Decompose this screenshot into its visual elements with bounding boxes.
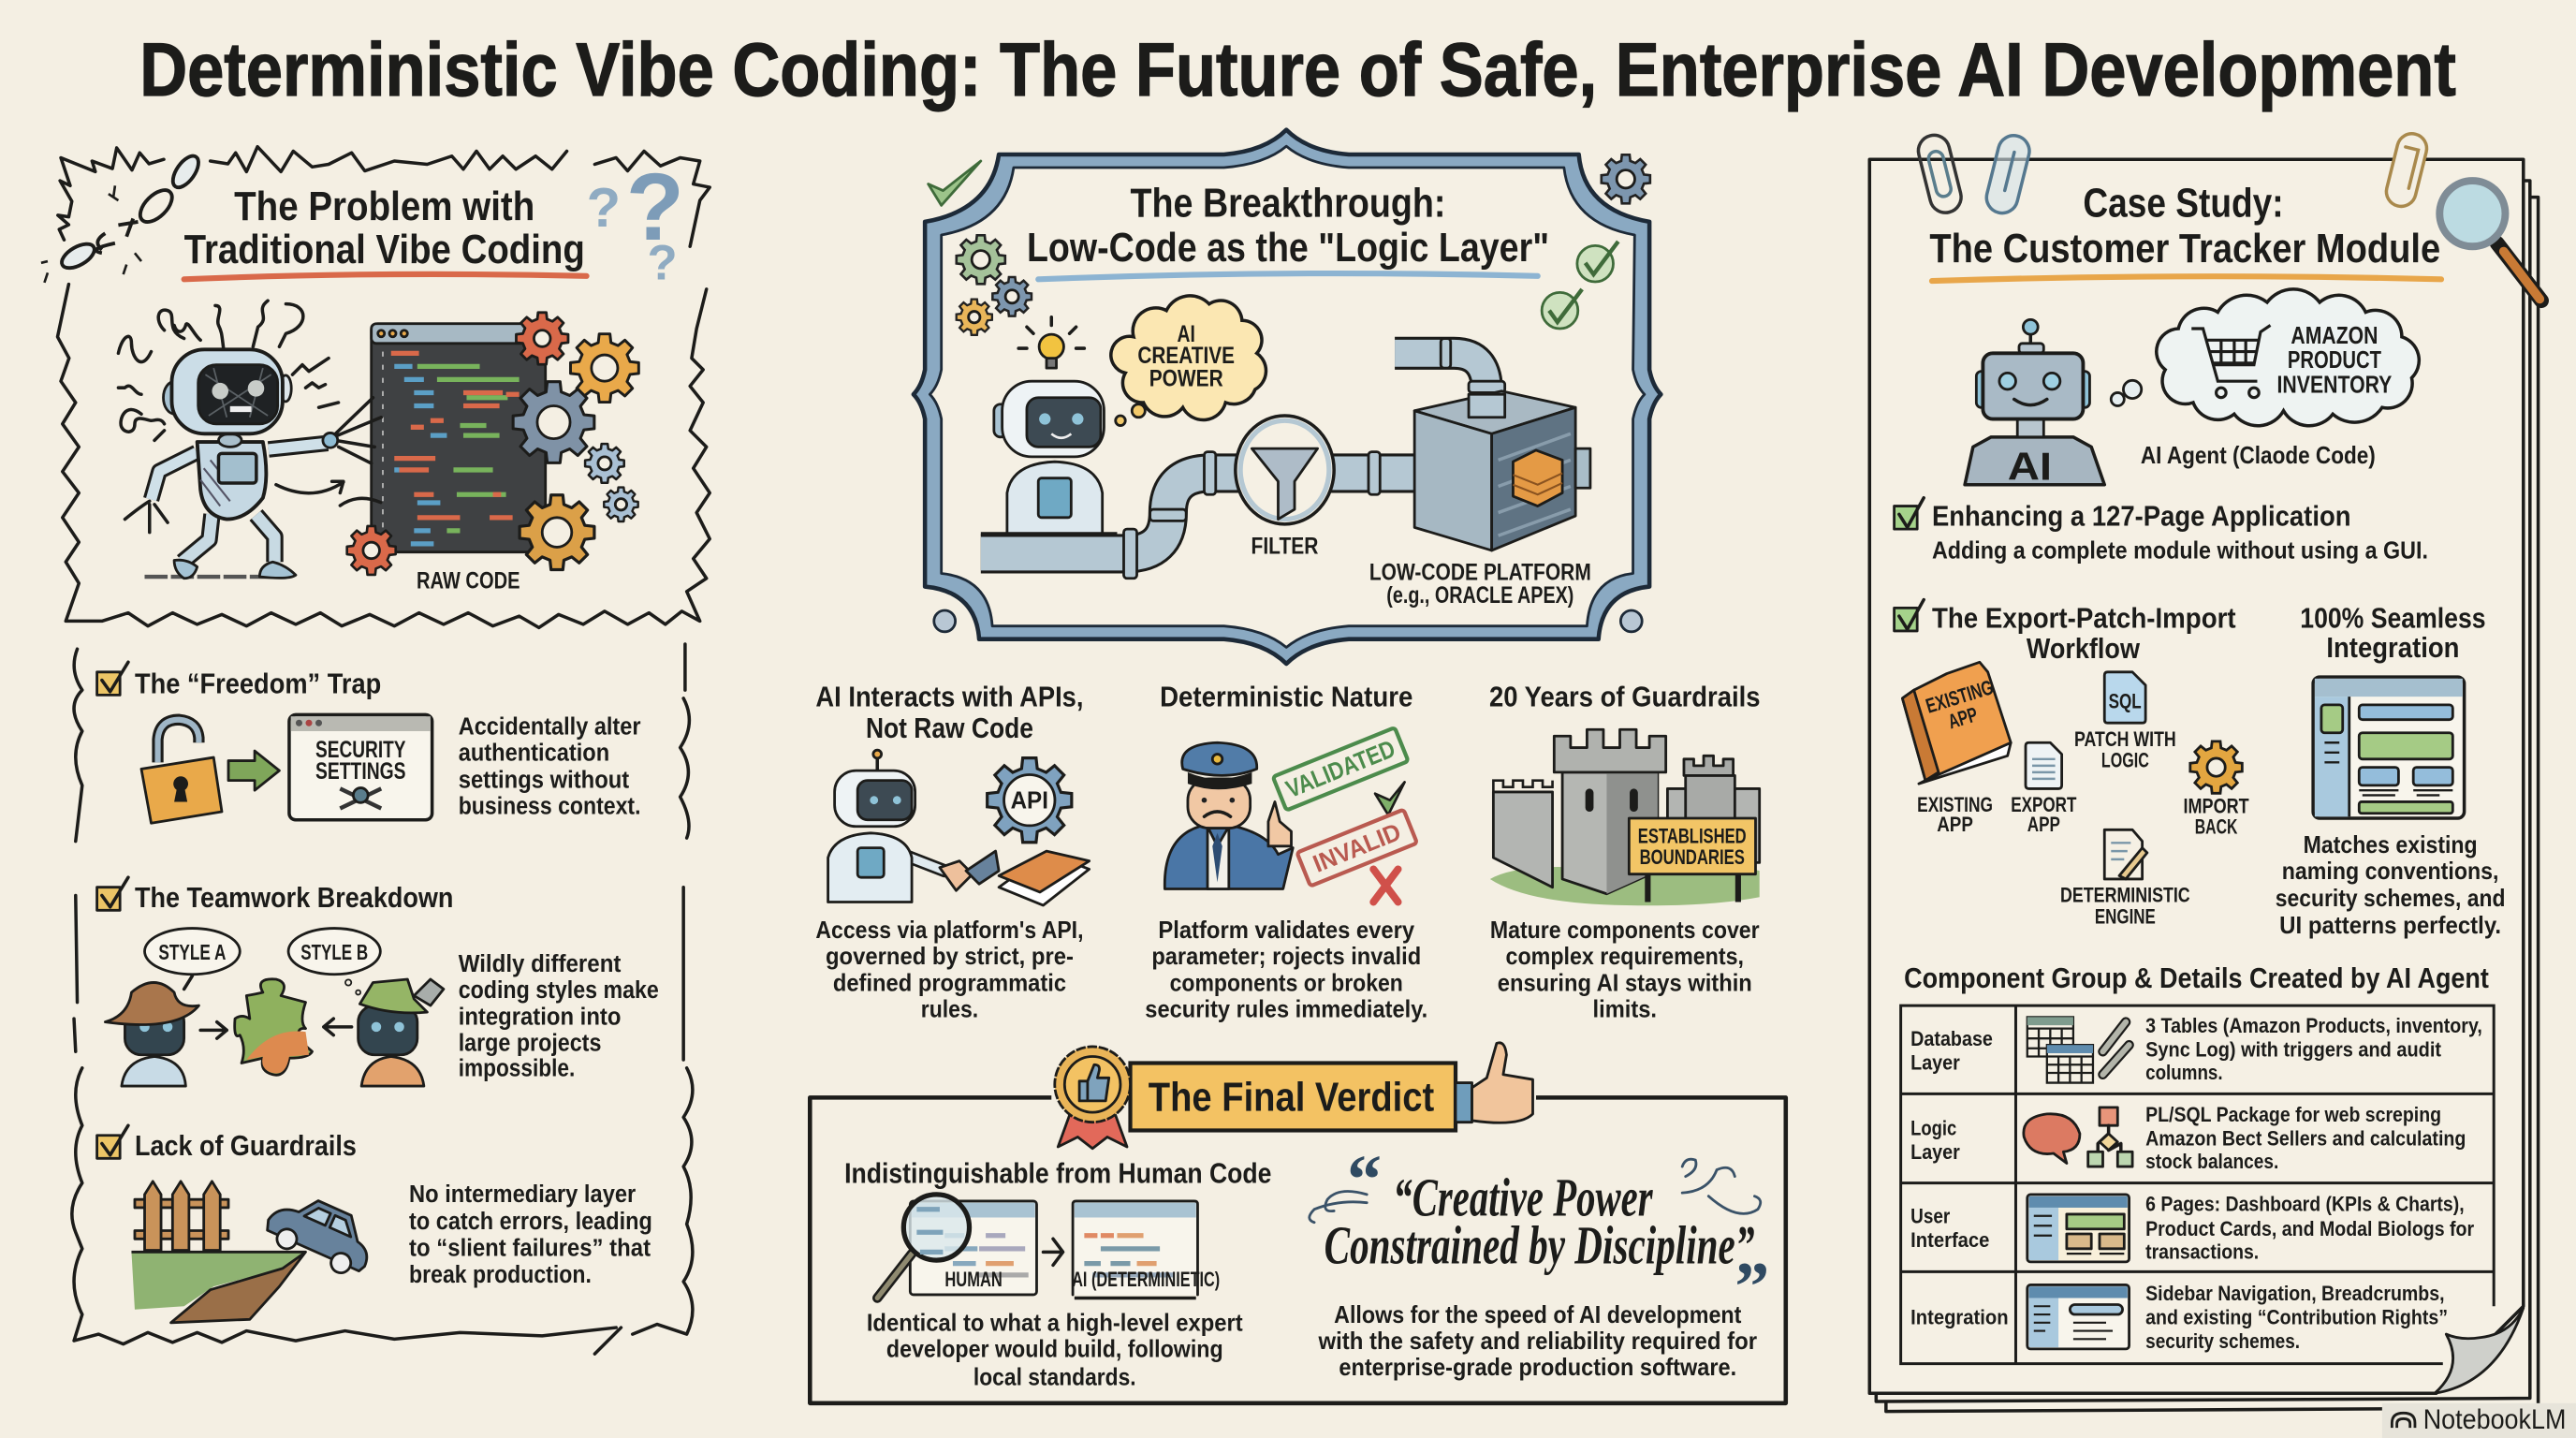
icon: check marks and gears (929, 154, 1650, 632)
heading (815, 681, 1083, 744)
jagged frame (57, 147, 710, 627)
row: user interface: 6 Pages: Dashboard (KPIs & Charts), (2145, 1192, 2465, 1215)
icon: pipes (981, 339, 1505, 579)
panel: the breakthrough (914, 130, 1661, 664)
item: seamless integration (2276, 601, 2505, 939)
cloud: amazon product inventory: INVENTORY (2277, 370, 2393, 398)
castle illustration (1490, 729, 1760, 905)
heading: Indistinguishable from Human Code (844, 1157, 1271, 1190)
heading: Lack of Guardrails (135, 1129, 357, 1162)
text: developer would build, following (886, 1337, 1223, 1363)
column: deterministic nature (1145, 681, 1427, 1022)
text: with the safety and reliability required for (1318, 1328, 1757, 1355)
text: coding styles make (459, 976, 659, 1004)
window: AI: AI (DETERMINIETIC) (1072, 1268, 1220, 1291)
text: Allows for the speed of AI development (1334, 1302, 1742, 1328)
heading (1027, 181, 1549, 279)
wavy frame (72, 644, 693, 1354)
stamp: invalid (1297, 810, 1417, 887)
icon: existing app book: EXISTING (1923, 675, 1996, 718)
page curl (2435, 1308, 2524, 1393)
row: logic layer: Logic (1910, 1117, 1956, 1140)
text: impossible. (459, 1054, 575, 1082)
icon: falling car (260, 1185, 381, 1282)
cloud: amazon product inventory: AMAZON (2291, 321, 2378, 349)
text: security rules immediately. (1145, 996, 1427, 1022)
quote (1325, 1167, 1754, 1276)
text: complex requirements, (1506, 944, 1744, 970)
icon: brain and flow (2024, 1108, 2132, 1167)
text: authentication (459, 739, 609, 767)
robot: creative (981, 381, 1117, 534)
text: Identical to what a high-level expert (867, 1311, 1243, 1337)
banner: The Final Verdict (1149, 1074, 1435, 1120)
icon: API gear: API (1011, 785, 1048, 814)
icon: question marks: ? (648, 235, 678, 290)
text: break production. (409, 1260, 592, 1288)
icon: existing app book: APP (1945, 702, 1981, 733)
text: limits. (1593, 996, 1657, 1022)
text (1145, 917, 1427, 1022)
text: local standards. (973, 1364, 1136, 1390)
item: lack of guardrails (97, 1125, 652, 1323)
robot: AI agent (1965, 319, 2104, 488)
heading: The Problem with (234, 183, 534, 229)
icon: question marks (587, 154, 684, 290)
label (2183, 795, 2249, 839)
label: LOGIC (2101, 749, 2149, 772)
decorative swirls (1310, 1159, 1761, 1223)
label (2011, 793, 2077, 836)
icon: arrow (324, 1019, 352, 1035)
row: integration: Integration (1910, 1306, 2009, 1329)
heading: The Breakthrough: (1131, 181, 1445, 227)
bubble: style A: STYLE A (158, 940, 226, 964)
text: business context. (459, 792, 641, 820)
label (2060, 884, 2190, 928)
robot: confused (118, 301, 381, 579)
icon: existing app book (1902, 662, 2011, 784)
text: Access via platform's API, (815, 917, 1083, 944)
text: No intermediary layer (409, 1180, 636, 1208)
text (867, 1311, 1243, 1390)
text: Matches existing (2304, 832, 2478, 858)
heading: Traditional Vibe Coding (184, 227, 585, 272)
icon: shopping cart (2191, 325, 2271, 398)
label: EXPORT (2011, 793, 2077, 816)
row: integration: security schemes. (2145, 1329, 2300, 1353)
icon: export doc (2026, 742, 2062, 788)
item: enhancing (1895, 498, 2428, 565)
text (459, 712, 641, 820)
icon: paper clips (1915, 130, 2430, 216)
icon: import gear (2190, 741, 2242, 793)
text (459, 949, 659, 1082)
row: logic layer: Amazon Bect Sellers and calculating (2145, 1126, 2466, 1150)
icon: dashboard (2027, 1195, 2130, 1262)
cloud: AI creative power (1111, 296, 1266, 426)
icon: logo (2392, 1413, 2415, 1428)
icon: question marks: ? (626, 154, 684, 260)
text: parameter; rojects invalid (1151, 944, 1421, 970)
text: to catch errors, leading (409, 1207, 652, 1235)
icon: check (1375, 782, 1405, 814)
window: AI (1072, 1201, 1220, 1298)
text: settings without (459, 766, 629, 794)
text (1490, 917, 1760, 1022)
sign: established boundaries (1629, 818, 1755, 902)
icon: check box (97, 662, 128, 695)
row: logic layer: Layer (1910, 1140, 1960, 1164)
window: human: HUMAN (944, 1268, 1003, 1291)
icon: open lock (141, 720, 222, 823)
code window (372, 324, 546, 552)
heading: The Customer Tracker Module (1929, 226, 2440, 271)
icon: sidebar window (2027, 1284, 2130, 1349)
window: human (910, 1201, 1036, 1295)
label: raw code: RAW CODE (417, 568, 520, 594)
icon: puzzle piece (235, 979, 313, 1075)
heading: 100% Seamless (2300, 601, 2486, 634)
squiggles (118, 301, 339, 440)
label (1917, 793, 1993, 836)
cloud: AI creative power: AI (1178, 322, 1195, 347)
icon: arrow (228, 751, 279, 790)
text (815, 917, 1083, 1022)
quote marks (1347, 1141, 1769, 1325)
heading: 20 Years of Guardrails (1489, 681, 1761, 713)
bubble: style B: STYLE B (300, 940, 368, 964)
row: database layer: Layer (1910, 1051, 1960, 1075)
text: Accidentally alter (459, 712, 641, 740)
label: low-code platform: (e.g., ORACLE APEX) (1386, 583, 1573, 609)
security settings window: SETTINGS (315, 759, 406, 785)
icon: platform box (1414, 391, 1590, 550)
row: database layer: 3 Tables (Amazon Products, inventory, (2145, 1014, 2482, 1037)
icon: question marks: ? (587, 176, 621, 239)
column: 20 years of guardrails (1489, 681, 1761, 1022)
paper stack (1869, 159, 2539, 1412)
row: logic layer: PL/SQL Package for web screping (2145, 1103, 2441, 1126)
text: enterprise-grade production software. (1339, 1355, 1736, 1381)
robot: AI agent: AI (2008, 444, 2052, 488)
robot with green hat (359, 979, 444, 1086)
text (409, 1180, 652, 1288)
cloud: amazon product inventory (2111, 289, 2419, 426)
label: APP (2027, 813, 2060, 836)
text: large projects (459, 1028, 601, 1056)
item: workflow (1895, 600, 2249, 928)
icon: magnifier (877, 1195, 970, 1298)
icon: tables and links (2027, 1017, 2130, 1083)
verdict box (810, 1097, 1786, 1403)
icon: cliff (131, 1252, 305, 1323)
quote: “Creative Power (1393, 1167, 1653, 1228)
icon: gears (347, 313, 638, 575)
cloud: AI creative power: CREATIVE (1137, 344, 1235, 369)
icon: pen doc (2104, 829, 2147, 879)
stamp: invalid: INVALID (1309, 817, 1405, 878)
text: Mature components cover (1490, 917, 1760, 944)
label: EXISTING (1917, 793, 1993, 816)
bubble: style A (145, 929, 240, 990)
icon: rule book (999, 851, 1090, 905)
text: governed by strict, pre- (826, 944, 1074, 970)
heading: components table: Component Group & Details Created by AI Agent (1904, 961, 2489, 994)
label: AI agent: AI Agent (Claode Code) (2141, 443, 2376, 469)
heading: AI Interacts with APIs, (815, 681, 1083, 713)
heading: Integration (2326, 631, 2460, 664)
table grid (1901, 1005, 2494, 1364)
icon: SQL doc (2104, 672, 2145, 723)
panel: the problem (41, 147, 710, 627)
text: integration into (459, 1002, 621, 1030)
label: low-code platform: LOW-CODE PLATFORM (1369, 561, 1591, 586)
text: Wildly different (459, 949, 622, 977)
heading: Low-Code as the "Logic Layer" (1027, 225, 1549, 271)
icon: magnifying glass (2438, 179, 2541, 301)
sign: established boundaries: BOUNDARIES (1640, 845, 1745, 869)
text: ensuring AI stays within (1498, 970, 1752, 996)
text: defined programmatic (833, 970, 1066, 996)
icon: arrow (1044, 1239, 1063, 1265)
row: user interface: User (1910, 1205, 1951, 1228)
table (1901, 1005, 2494, 1364)
icon: arrow (200, 1022, 227, 1038)
icon: SQL doc: SQL (2109, 689, 2142, 712)
heading (2300, 601, 2486, 664)
icon: check box (1895, 600, 1924, 631)
cloud: amazon product inventory: PRODUCT (2288, 345, 2381, 374)
quote: Constrained by Discipline” (1325, 1215, 1754, 1276)
row: database layer (1910, 1014, 2482, 1084)
quote marks: ” (1734, 1248, 1769, 1325)
label: low-code platform (1369, 561, 1591, 609)
panel: problem details (72, 644, 693, 1354)
icon: rosette (1055, 1047, 1131, 1149)
label: BACK (2195, 815, 2238, 839)
bubble: style B (288, 929, 380, 994)
heading: Deterministic Nature (1160, 681, 1412, 713)
text: to “slient failures” that (409, 1234, 651, 1262)
heading (184, 183, 587, 279)
heading: The Export-Patch-Import (1932, 601, 2236, 634)
icon: check box (97, 877, 128, 910)
row: user interface: transactions. (2145, 1240, 2259, 1263)
label: ENGINE (2095, 904, 2156, 928)
icon: broken chain (41, 152, 203, 283)
sub-panel: indistinguishable (844, 1157, 1271, 1390)
heading: The Teamwork Breakdown (135, 881, 453, 914)
robot with brown hat (105, 983, 198, 1086)
row: integration (1910, 1282, 2448, 1353)
officer illustration (1164, 742, 1293, 888)
text: naming conventions, (2282, 858, 2498, 885)
label (2074, 727, 2176, 772)
heading (1929, 181, 2441, 281)
heading: The “Freedom” Trap (135, 668, 381, 700)
icon: UI window (2313, 677, 2465, 818)
icon: check box (97, 1125, 128, 1158)
item: freedom trap (97, 662, 641, 823)
heading (1932, 601, 2236, 665)
row: logic layer: stock balances. (2145, 1150, 2278, 1173)
text: security schemes, and (2276, 886, 2505, 912)
label: APP (1937, 813, 1973, 836)
label: PATCH WITH (2074, 727, 2176, 751)
row: user interface: Interface (1910, 1228, 1989, 1252)
row: integration: Sidebar Navigation, Breadcrumbs, (2145, 1282, 2445, 1305)
row: database layer: Database (1910, 1027, 1993, 1050)
item: teamwork breakdown (97, 877, 659, 1086)
label: filter: FILTER (1251, 534, 1319, 559)
security settings window: SECURITY (315, 738, 406, 763)
label: IMPORT (2183, 795, 2249, 818)
label: DETERMINISTIC (2060, 884, 2190, 907)
text (1318, 1302, 1757, 1381)
sub-panel: quote (1310, 1141, 1769, 1381)
text: rules. (921, 996, 978, 1022)
panel: case study (1869, 130, 2541, 1412)
badge: NotebookLM (2382, 1403, 2576, 1438)
text: UI patterns perfectly. (2279, 913, 2501, 939)
row: database layer: Sync Log) with triggers and audit (2145, 1037, 2442, 1061)
icon: lightbulb (1018, 317, 1084, 368)
text: Platform validates every (1158, 917, 1415, 944)
heading: Workflow (2027, 632, 2140, 665)
icon: filter (1236, 416, 1334, 524)
banner (1131, 1064, 1456, 1130)
icon: fence (135, 1181, 228, 1251)
column: AI interacts with APIs (815, 681, 1090, 1022)
text: components or broken (1170, 970, 1403, 996)
row: integration: and existing “Contribution Rights” (2145, 1306, 2448, 1329)
text (2276, 832, 2505, 939)
heading: Case Study: (2083, 181, 2284, 227)
panel: the final verdict (810, 1043, 1786, 1403)
quote marks: “ (1347, 1141, 1382, 1218)
row: user interface: Product Cards, and Modal Biologs for (2145, 1217, 2475, 1240)
icon: thumbs up (1456, 1043, 1532, 1123)
icon: API gear (988, 758, 1072, 843)
icon: cross (1373, 869, 1398, 902)
row: logic layer (1910, 1103, 2466, 1173)
cloud: AI creative power: POWER (1149, 366, 1223, 391)
icon: check box (1895, 498, 1924, 529)
sign: established boundaries: ESTABLISHED (1638, 824, 1747, 847)
ornate frame (914, 130, 1661, 664)
row: database layer: columns. (2145, 1061, 2223, 1084)
item: enhancing: Enhancing a 127-Page Application (1932, 500, 2351, 533)
stamp: validated: VALIDATED (1282, 734, 1399, 803)
heading: Not Raw Code (866, 712, 1033, 744)
item: enhancing: Adding a complete module without using a GUI. (1932, 538, 2428, 565)
robot: handshake (828, 750, 999, 902)
row: user interface (1910, 1192, 2475, 1263)
security settings window (289, 714, 432, 820)
